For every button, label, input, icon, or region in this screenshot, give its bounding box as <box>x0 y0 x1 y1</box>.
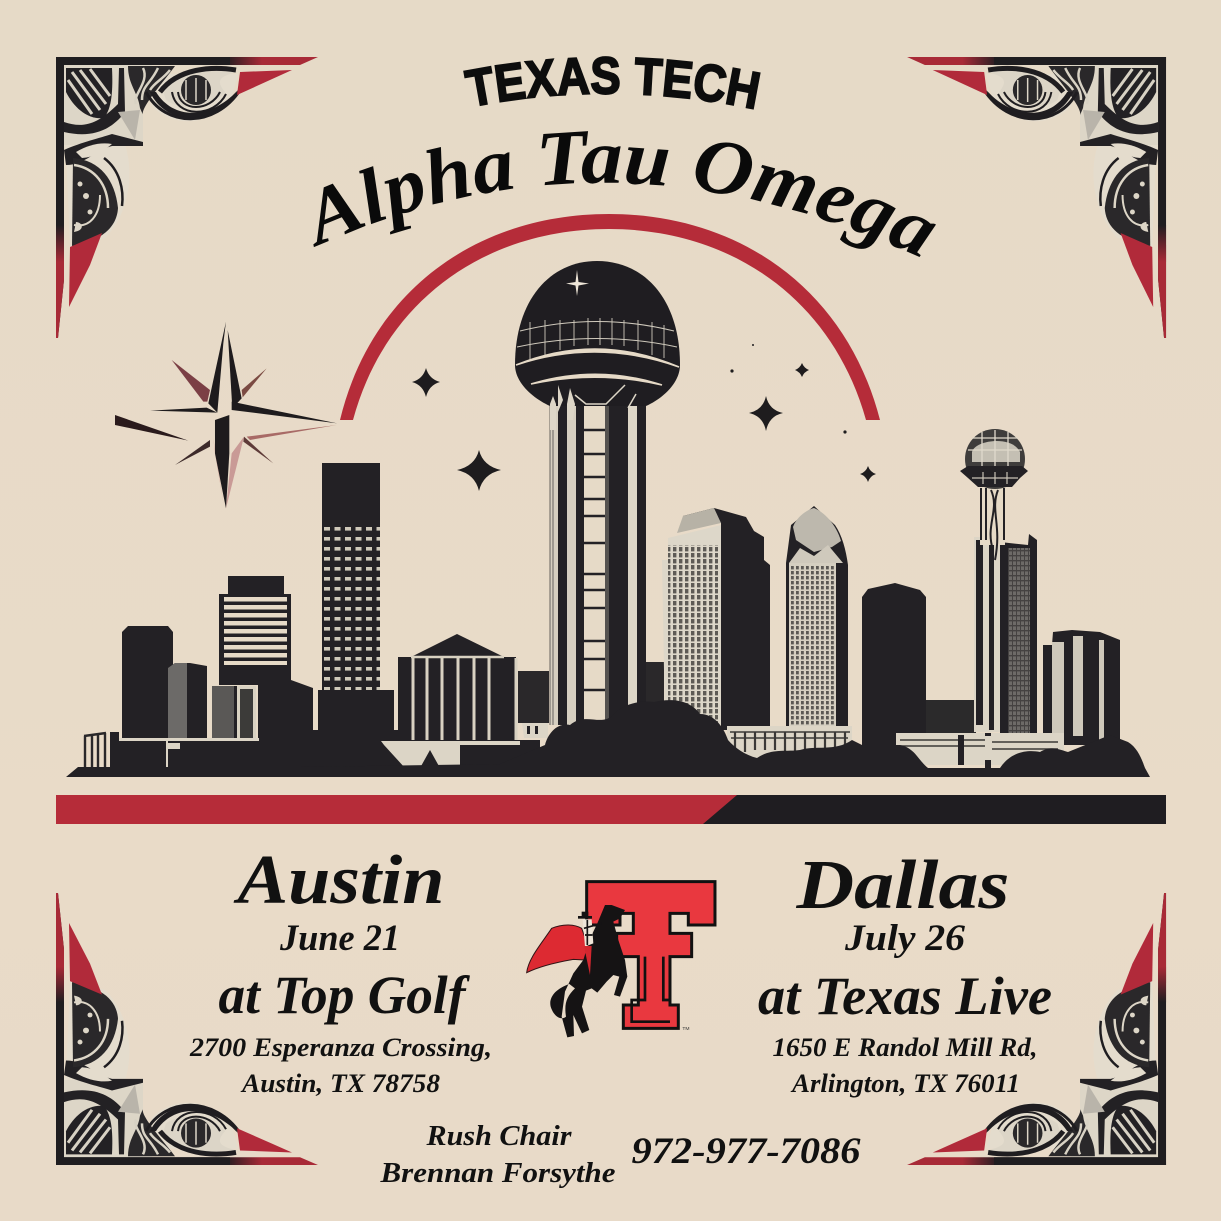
Texas Tech double T logo with rider <box>527 882 715 1037</box>
Austin address: Austin, TX 78758 <box>240 1069 440 1098</box>
left buildings <box>122 463 400 770</box>
Dallas address: Arlington, TX 76011 <box>790 1069 1020 1098</box>
compass star <box>115 322 337 508</box>
red cape <box>527 925 592 973</box>
corner ornament: bottom right <box>907 893 1166 1165</box>
double T <box>587 882 715 1028</box>
dome hall <box>380 634 549 770</box>
Austin heading: Austin <box>233 842 444 919</box>
Austin venue: at Top Golf <box>218 965 470 1025</box>
corner ornament: bottom left <box>56 893 318 1165</box>
rush chair contact <box>379 1120 861 1189</box>
rush chair name: Brennan Forsythe <box>379 1157 616 1189</box>
phone number: 972-977-7086 <box>632 1131 861 1172</box>
Austin address: 2700 Esperanza Crossing, <box>189 1033 492 1062</box>
sparkle stars <box>412 344 876 491</box>
Dallas heading: Dallas <box>795 847 1010 924</box>
red arch <box>340 214 880 420</box>
title: Alpha Tau Omega: Alpha Tau Omega <box>313 131 936 257</box>
corner ornament: top right <box>907 57 1166 338</box>
reunion tower <box>515 261 680 725</box>
Dallas event text <box>758 847 1052 1098</box>
Dallas address: 1650 E Randol Mill Rd, <box>772 1033 1038 1062</box>
horizontal divider bar <box>56 795 1166 824</box>
title: Texas Tech: TEXAS TECH <box>463 56 761 110</box>
Dallas venue: at Texas Live <box>758 966 1052 1026</box>
Dallas date: July 26 <box>844 918 966 959</box>
rider <box>578 912 602 975</box>
Austin event text <box>189 842 492 1098</box>
podiums and ground <box>66 700 1150 777</box>
corner ornament: top left <box>56 57 318 338</box>
right buildings <box>646 506 1120 745</box>
trademark: TM <box>682 1026 690 1032</box>
Austin date: June 21 <box>279 918 400 959</box>
city skyline <box>66 261 1150 777</box>
horse <box>550 905 627 1037</box>
ball tower <box>960 429 1028 732</box>
rush chair label: Rush Chair <box>425 1120 572 1152</box>
